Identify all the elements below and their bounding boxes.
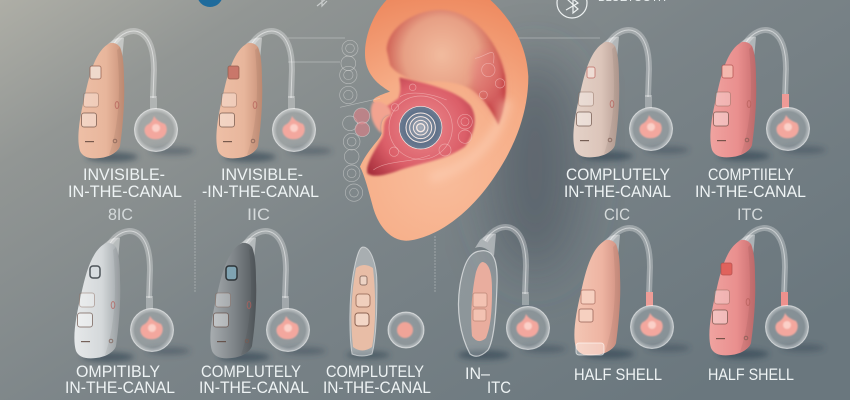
concha bbox=[367, 77, 475, 176]
upper fossa bbox=[387, 10, 506, 125]
icon: bluetooth mark bbox=[317, 0, 327, 6]
label: dark grey: IN-THE-CANAL bbox=[199, 379, 309, 397]
device: IIC peach bbox=[78, 31, 194, 162]
label: ITC: IN-THE-CANAL bbox=[695, 183, 806, 201]
label: slim peach: COMPLUTELY bbox=[326, 363, 424, 381]
label: CIC bbox=[564, 166, 671, 224]
label: IIC peach: INVISIBLE- bbox=[83, 166, 165, 184]
label: dark grey: COMPLUTELY bbox=[201, 363, 301, 381]
label: CIC: CIC bbox=[604, 205, 630, 224]
device: CIC beige bbox=[573, 30, 689, 161]
label: IIC rose: INVISIBLE- bbox=[221, 166, 303, 184]
label: ITC bbox=[695, 166, 806, 224]
ear shadow bbox=[490, 55, 580, 275]
icon: bluetooth badge bbox=[557, 0, 666, 18]
illustration: ear bbox=[340, 0, 528, 241]
tragus bbox=[371, 101, 391, 133]
label: half shell pink: HALF SHELL bbox=[708, 366, 794, 384]
label: IIC peach: IN-THE-CANAL bbox=[68, 183, 182, 201]
device: dark grey bbox=[210, 231, 326, 362]
label: dark grey bbox=[199, 363, 309, 397]
connector lines bbox=[195, 38, 600, 292]
device: half shell pink bbox=[709, 228, 825, 359]
label: IIC rose bbox=[202, 166, 319, 224]
label: CIC: COMPLUTELY bbox=[566, 166, 670, 184]
label: in the canal: IN– bbox=[465, 365, 491, 383]
left swirl decoration bbox=[340, 40, 380, 201]
pink right fossa patch bbox=[472, 50, 504, 120]
label: IIC peach: 8IC bbox=[108, 205, 133, 224]
device: slim peach bbox=[346, 247, 424, 359]
helix rim highlight bbox=[430, 100, 507, 178]
label: in the canal: ITC bbox=[487, 379, 511, 397]
label: silver: IN-THE-CANAL bbox=[65, 379, 175, 397]
label: slim peach bbox=[323, 363, 431, 397]
device: silver bbox=[74, 231, 190, 362]
label: in the canal bbox=[465, 365, 511, 397]
device: IIC rose bbox=[216, 31, 332, 162]
ear drum spiral bbox=[399, 106, 442, 149]
device: ITC pink bbox=[710, 30, 826, 161]
label: IIC peach bbox=[68, 166, 182, 224]
device: clear shell bbox=[458, 227, 566, 360]
label: ITC: COMPTIIELY bbox=[708, 166, 794, 184]
label: slim peach: IN-THE-CANAL bbox=[323, 379, 431, 397]
label: silver bbox=[65, 363, 175, 397]
label: CIC: IN-THE-CANAL bbox=[564, 183, 671, 201]
label: ITC: ITC bbox=[737, 205, 763, 224]
label: silver: OMPITIBLY bbox=[76, 363, 160, 381]
label: IIC rose: -IN-THE-CANAL bbox=[202, 183, 319, 201]
label: IIC rose: IIC bbox=[247, 205, 270, 224]
label: half shell light: HALF SHELL bbox=[574, 366, 662, 384]
icon: blue badge bbox=[197, 0, 223, 7]
concha swirl lines bbox=[373, 52, 505, 170]
ear outer shape bbox=[360, 0, 528, 241]
device: half shell light bbox=[574, 228, 690, 359]
